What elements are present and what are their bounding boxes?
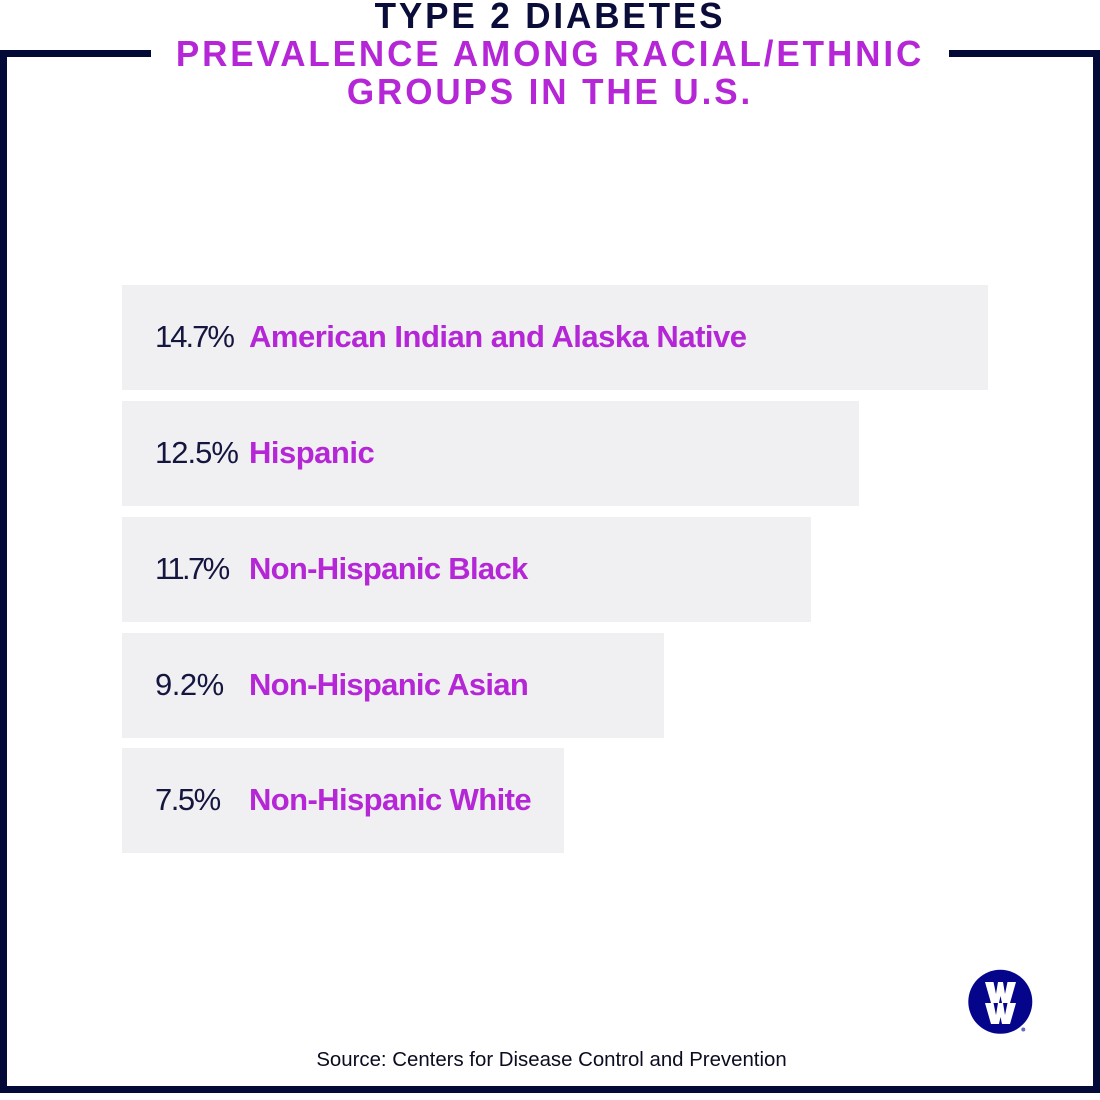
bar: Non-Hispanic Asian: Non-Hispanic Asian xyxy=(249,667,528,702)
bar: Hispanic xyxy=(122,401,859,506)
bar: Hispanic: 12.5% xyxy=(155,435,238,470)
bar: Non-Hispanic Black: Non-Hispanic Black xyxy=(249,551,528,586)
bar: Non-Hispanic White xyxy=(122,748,564,853)
bar: Non-Hispanic White: 7.5% xyxy=(155,782,220,817)
source text: Source: Centers for Disease Control and Prevention xyxy=(316,1049,787,1071)
bar: Non-Hispanic Asian: 9.2% xyxy=(155,667,224,702)
bar: Non-Hispanic White: Non-Hispanic White xyxy=(249,782,531,817)
bar: Non-Hispanic Black xyxy=(122,517,811,622)
title: PREVALENCE AMONG RACIAL/ETHNIC xyxy=(176,33,924,74)
bar: Hispanic: Hispanic xyxy=(249,435,374,470)
bar: American Indian and Alaska Native xyxy=(122,285,988,390)
bar chart xyxy=(122,285,988,853)
bar: American Indian and Alaska Native: American Indian and Alaska Native xyxy=(249,319,746,354)
title xyxy=(176,0,924,112)
bar: Non-Hispanic Asian xyxy=(122,633,664,738)
bar: Non-Hispanic Black: 11.7% xyxy=(155,551,228,586)
icon: WW logo xyxy=(968,970,1032,1034)
title: GROUPS IN THE U.S. xyxy=(347,71,753,112)
bar: American Indian and Alaska Native: 14.7% xyxy=(155,319,233,354)
